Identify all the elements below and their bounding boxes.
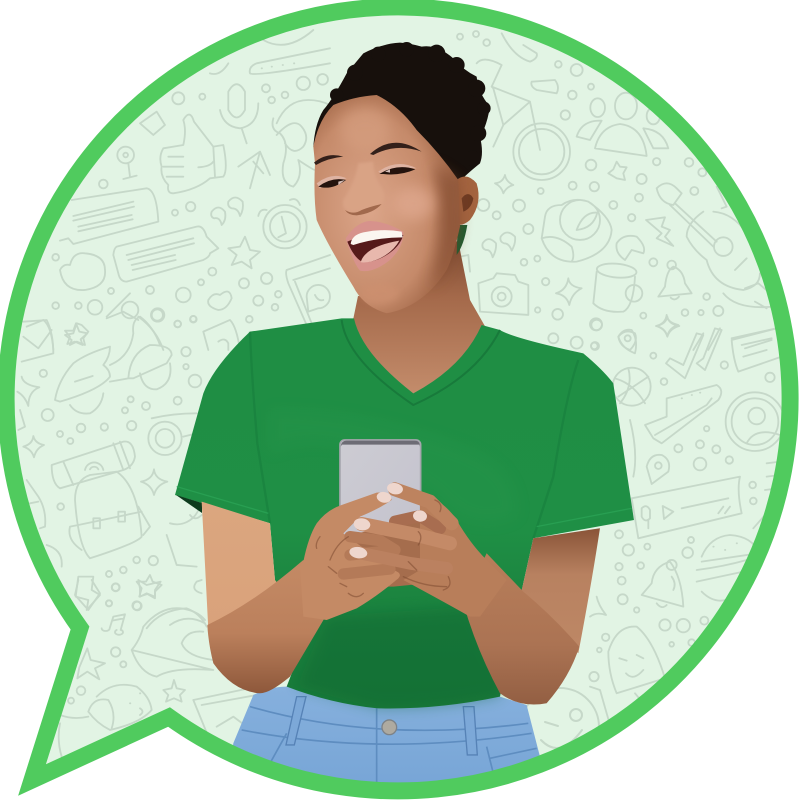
middle finger behind — [395, 516, 440, 528]
sleeve hem stitch — [177, 487, 632, 527]
doodle: circles — [457, 31, 723, 349]
creases — [316, 500, 450, 597]
left arm — [202, 502, 333, 693]
eye whites — [338, 169, 390, 185]
hair curls — [330, 42, 491, 166]
right upper arm — [520, 528, 600, 653]
under-nose shadow — [345, 204, 382, 215]
neck and chest — [352, 240, 486, 402]
doodle: map pin — [618, 330, 669, 484]
doodle: star — [65, 323, 162, 598]
doodle: chat box — [732, 328, 782, 372]
doodle: friend figure — [272, 100, 330, 187]
head — [313, 42, 491, 313]
doodle: circles — [52, 74, 328, 327]
doodle: microphone — [220, 84, 258, 143]
doodle: bell — [642, 560, 683, 607]
doodle: rubber duck — [542, 200, 612, 262]
doodle: circles — [40, 309, 201, 610]
doodle: clock — [258, 199, 307, 248]
doodle: lower-right scroll — [717, 187, 773, 308]
woman figure — [175, 42, 634, 790]
doodle: scooter — [55, 312, 172, 414]
doodle: strap — [250, 48, 330, 74]
doodle: mug — [593, 264, 642, 312]
doodle: quotation marks — [211, 197, 243, 225]
doodle: edge shapes — [630, 420, 780, 528]
right hand back — [403, 499, 507, 617]
doodle: ice cream face — [590, 627, 665, 725]
sleeve seams — [250, 332, 578, 538]
doodle: lightning tip — [75, 580, 100, 610]
chin highlight — [362, 283, 398, 303]
jeans button — [382, 720, 397, 735]
shirt shadow bottom — [297, 607, 503, 708]
doodle: location glass — [117, 147, 137, 179]
nose — [343, 162, 384, 213]
doodle: guitar — [657, 183, 760, 290]
ear — [455, 177, 479, 225]
doodle: crescent shape — [616, 236, 644, 260]
doodle: cloud — [60, 253, 105, 290]
doodle: handset — [502, 33, 537, 62]
doodle: dog face — [59, 685, 152, 757]
doodle: cloud — [132, 608, 213, 677]
right cheek shadow — [430, 163, 460, 290]
doodle: music note — [102, 614, 125, 635]
doodle: voice message — [632, 477, 742, 538]
face — [313, 95, 460, 313]
upper finger — [362, 524, 450, 543]
doodle: pin and check tips — [460, 255, 777, 350]
doodle: thumbs up — [160, 115, 226, 193]
filler between hands — [347, 520, 427, 587]
left forearm — [207, 560, 333, 693]
left hand — [300, 493, 400, 620]
doodle: star — [65, 237, 260, 345]
doodle: rolled bed — [52, 442, 135, 488]
doodle: phone with chat logo — [286, 255, 330, 325]
jeans seams — [242, 707, 537, 787]
doodles: right lower area — [589, 317, 784, 725]
doodle: backpack — [69, 462, 150, 558]
hands — [300, 482, 507, 620]
doodle: camera — [478, 273, 528, 315]
doodle: bicycle — [477, 60, 570, 180]
doodle: sparkles — [17, 377, 167, 495]
doodle: circles — [68, 583, 142, 704]
phone — [340, 440, 421, 553]
ear inner — [462, 194, 473, 212]
doodle: chat box centre — [113, 226, 218, 282]
jeans — [227, 687, 540, 790]
doodle: emoji winking — [521, 688, 599, 766]
doodle: people — [577, 93, 668, 156]
doodle: lightning — [646, 217, 673, 246]
doodles: upper-left area — [27, 30, 330, 350]
doodles: tail area — [59, 580, 257, 757]
doodle: chat box — [60, 188, 158, 244]
belt loops — [286, 697, 477, 755]
doodle: top edge arcs — [210, 30, 313, 74]
t-shirt — [175, 318, 634, 708]
shirt light patch — [270, 410, 517, 523]
doodle: quotation marks — [482, 232, 515, 257]
forehead sheen — [340, 108, 390, 152]
doodle: mail corner and ribbon — [27, 112, 165, 350]
doodles: left middle area — [17, 309, 207, 628]
right arm — [463, 528, 600, 705]
hair — [313, 43, 490, 185]
doodle: envelope — [22, 320, 53, 362]
fingernails — [349, 482, 428, 560]
cheek highlight — [393, 187, 433, 220]
doodle: photo frame — [192, 687, 257, 737]
nape hair — [457, 225, 467, 255]
doodle: double check — [666, 328, 722, 378]
doodle: lightning — [76, 577, 100, 610]
doodle: star — [77, 580, 185, 702]
doodle: edge objects — [18, 410, 207, 628]
eyes — [318, 167, 415, 188]
eyelids — [317, 164, 417, 188]
doodle: basketball — [613, 368, 651, 406]
doodle: profile avatar — [726, 392, 784, 451]
thumb — [395, 489, 452, 523]
right forearm — [463, 553, 579, 705]
doodle: heart — [208, 292, 232, 310]
mouth — [346, 221, 403, 271]
phone top edge — [341, 441, 420, 447]
doodle: arrow — [238, 152, 270, 188]
doodle: wallet — [203, 320, 240, 350]
doodle: wheel — [148, 413, 197, 455]
doodle: circles — [589, 320, 775, 681]
lower finger — [358, 553, 447, 568]
doodles: upper-right area — [457, 31, 777, 350]
collar seam — [342, 320, 500, 405]
eyebrows — [314, 143, 422, 165]
doodle: bell — [658, 261, 692, 299]
doodle: sneaker — [645, 385, 721, 443]
doodle: star and sparkle — [495, 162, 678, 336]
left upper arm — [202, 502, 280, 630]
doodle: sparkle — [590, 317, 679, 617]
sleeve underside shadow — [176, 495, 202, 513]
hidden fingers of left hand — [343, 537, 395, 574]
doodle: burger — [697, 535, 758, 601]
doodle: scooter handle — [107, 293, 163, 350]
